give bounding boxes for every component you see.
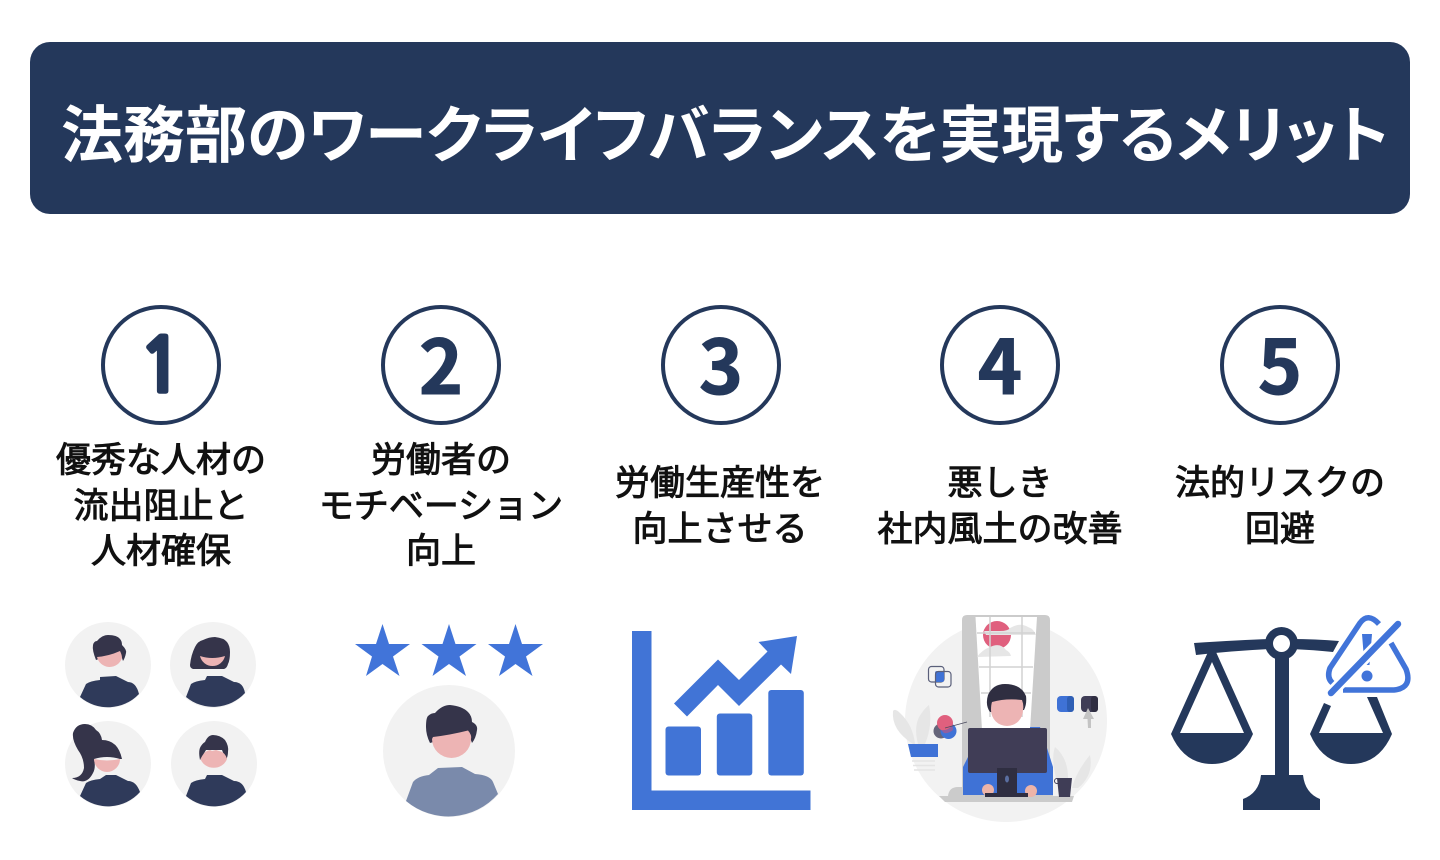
label 2 (319, 432, 563, 574)
number badge 2 (381, 305, 501, 425)
label 5: 法的リスクの (1175, 455, 1385, 506)
title banner (30, 42, 1410, 214)
label 2: 労働者の (371, 432, 511, 483)
label 2: 向上 (406, 523, 476, 574)
laptop monitor (968, 728, 1047, 797)
label 4 (877, 455, 1122, 552)
avatar: man with short hair bottom right (171, 721, 257, 807)
scales (1171, 627, 1392, 810)
person avatar (383, 685, 515, 817)
plant right (1053, 747, 1091, 788)
avatar: woman with ponytail bottom left (65, 721, 151, 807)
rising arrow (674, 636, 797, 716)
label 4: 悪しき (947, 455, 1052, 506)
number badge 3: 3 (699, 307, 743, 416)
floating shapes left (928, 666, 967, 739)
warning triangle with slash (1328, 617, 1408, 693)
number badge 5: 5 (1258, 307, 1302, 416)
window (962, 615, 1050, 790)
background circle (905, 620, 1107, 822)
plant left (893, 705, 938, 770)
axes (632, 631, 810, 810)
number badge 1: 1 (138, 330, 184, 404)
icon: person at computer by a window (893, 615, 1107, 822)
desk (939, 787, 1074, 802)
number badge 4: 4 (978, 307, 1022, 416)
label 1 (56, 432, 266, 574)
label 3 (615, 455, 825, 552)
title: 法務部のワークライフバランスを実現するメリット (61, 85, 1389, 175)
number badge 1 (101, 305, 221, 425)
label 4: 社内風土の改善 (877, 500, 1122, 552)
label 1: 人材確保 (91, 523, 231, 574)
label 3: 労働生産性を (615, 455, 825, 506)
floating squares right (1057, 696, 1098, 728)
bars (666, 726, 701, 776)
number badge 2: 2 (419, 307, 463, 416)
icon: growth bar chart with arrow (632, 631, 810, 810)
pivot hole (1273, 635, 1290, 652)
number badge 4 (940, 305, 1060, 425)
label 2: モチベーション (319, 478, 563, 528)
avatar: man top left (65, 622, 151, 708)
icon: four employee avatars (65, 622, 257, 807)
label 1: 流出阻止と (73, 478, 248, 528)
three stars (355, 624, 543, 676)
number badge 5 (1220, 305, 1340, 425)
label 5: 回避 (1245, 500, 1315, 552)
hands (982, 784, 994, 796)
person (963, 684, 1053, 795)
label 3: 向上させる (632, 500, 808, 552)
mug (1054, 778, 1072, 797)
avatar: woman with bob top right (170, 622, 256, 708)
icon: scales of justice with warning (1171, 617, 1408, 810)
label 1: 優秀な人材の (56, 432, 266, 483)
label 5 (1175, 455, 1385, 552)
number badge 3 (661, 305, 781, 425)
icon: three stars and person (355, 624, 543, 817)
